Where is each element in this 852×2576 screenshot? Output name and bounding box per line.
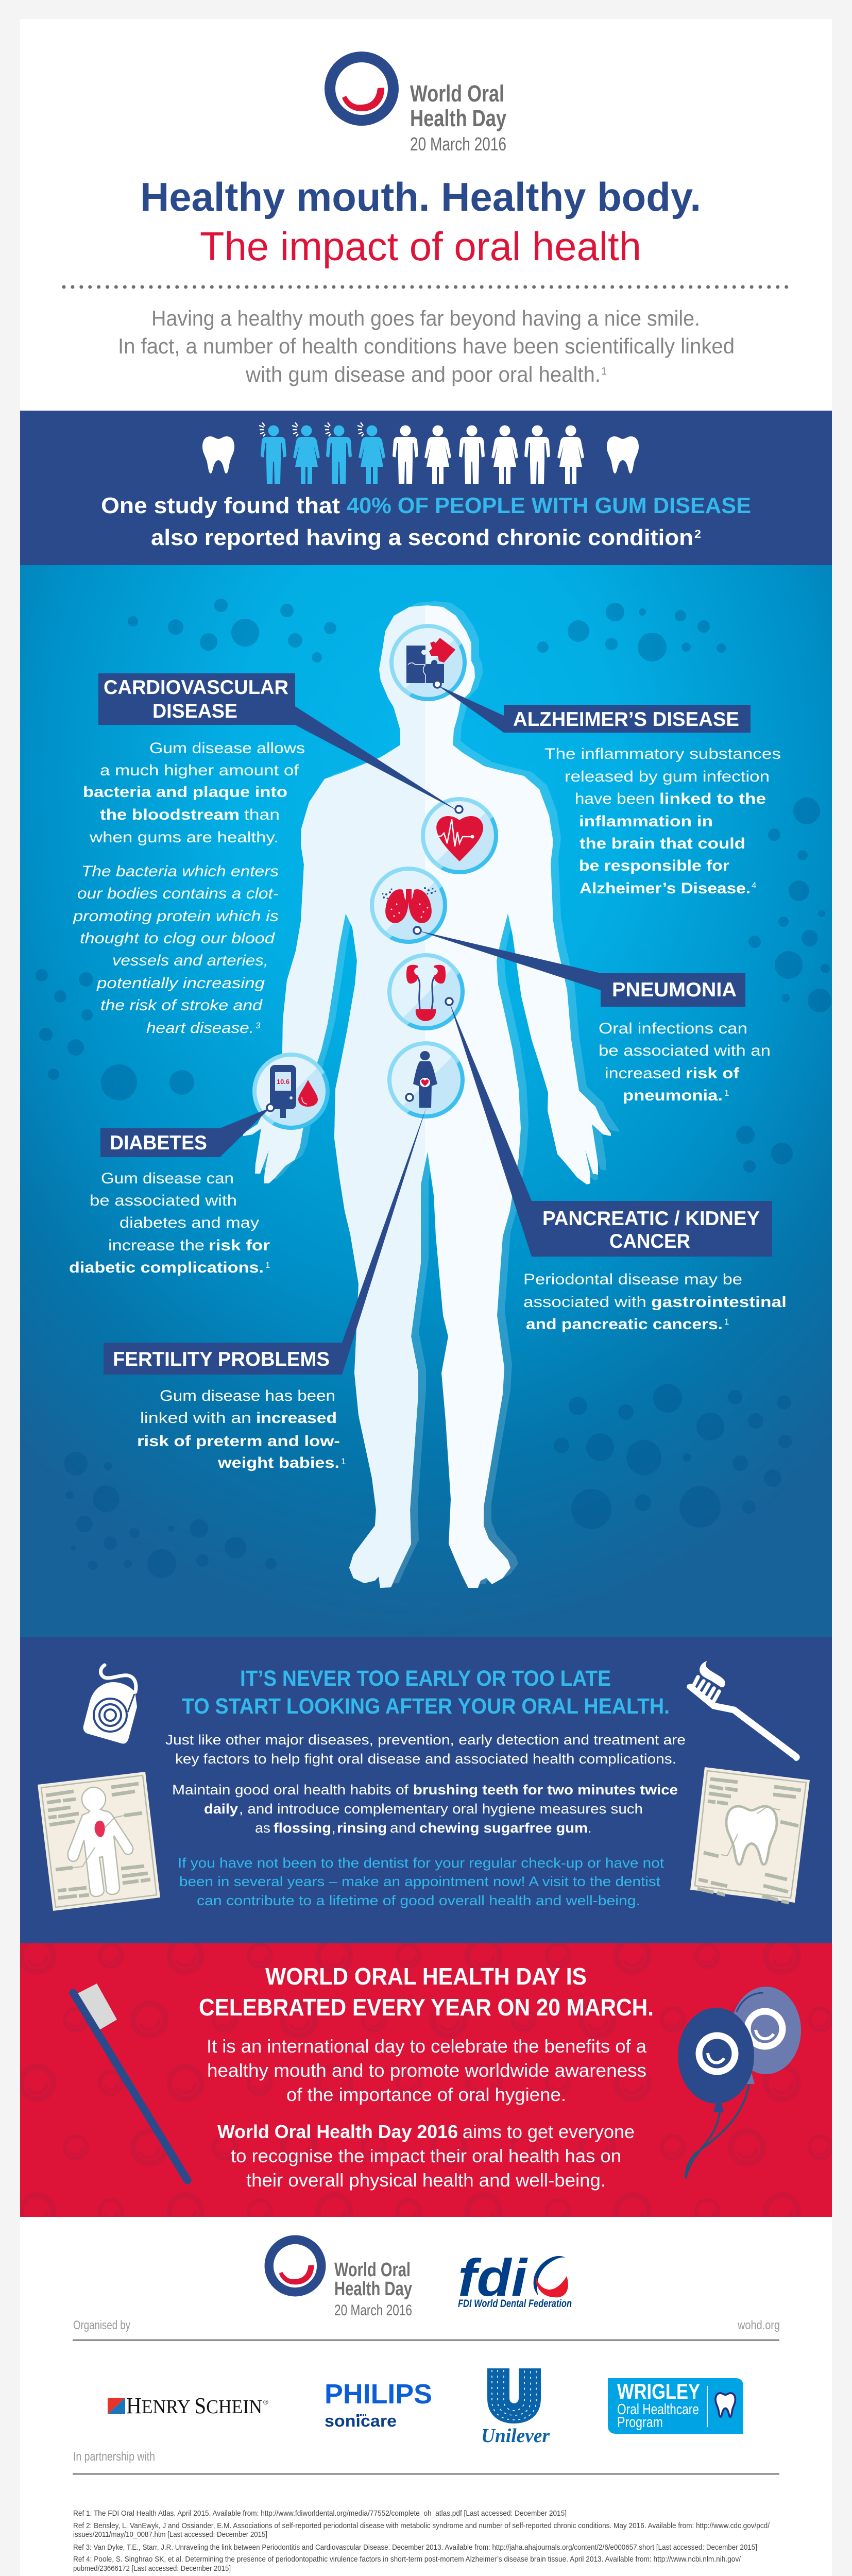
text: oral habits paragraph: rinsing [337, 1820, 387, 1836]
callout: cardiovascular disease [98, 673, 295, 725]
text: cardiovascular description: The bacteria which enters [81, 863, 279, 880]
text: oral habits paragraph: chewing sugarfree gum [419, 1820, 588, 1836]
text: dentist call to action: can contribute to a lifetime of good overall health and well-being. [197, 1893, 640, 1908]
callout: cardiovascular disease: CARDIOVASCULAR [104, 676, 288, 699]
text: alzheimer's description: the brain that could [580, 835, 745, 852]
people pictogram: 4 of 10 highlighted [259, 422, 584, 484]
statistic text: One study found that [101, 493, 340, 518]
text: dentist call to action [178, 1855, 664, 1908]
text: cardiovascular description: when gums are healthy. [89, 829, 279, 846]
heading: celebrated every year: CELEBRATED EVERY YEAR ON 20 MARCH. [199, 1994, 654, 2021]
title: Healthy mouth. Healthy body. [140, 174, 701, 219]
icon: glucose meter circle: 10.6 [277, 1078, 289, 1086]
logo: Unilever [481, 2368, 550, 2447]
callout: fertility problems [104, 1343, 342, 1375]
logo: Wrigley Oral Healthcare Program: Oral Healthcare [617, 2401, 699, 2418]
footer logo: World Oral Health Day [269, 2240, 412, 2319]
text: cardiovascular description: than [244, 806, 280, 823]
text: fertility description: 1 [341, 1456, 346, 1466]
label: organised by: Organised by [73, 2318, 130, 2332]
intro text: Having a healthy mouth goes far beyond having a nice smile. [151, 306, 700, 330]
callout: pneumonia: PNEUMONIA [612, 979, 737, 1001]
logo: Henry Schein: HENRY SCHEIN [126, 2393, 262, 2418]
text: pancreatic description: Periodontal disease may be [523, 1271, 742, 1288]
text: pancreatic description: associated with [523, 1294, 646, 1311]
footer logo: World Oral Health Day: World Oral [334, 2259, 411, 2281]
logo: FDI World Dental Federation: FDI World Dental Federation [458, 2298, 572, 2310]
text: diabetes description: risk for [209, 1237, 270, 1254]
text: diabetes description: 1 [265, 1260, 270, 1270]
text: alzheimer's description: The inflammatory substances [544, 745, 781, 762]
subtitle: The impact of oral health [200, 224, 641, 269]
text: oral habits paragraph: and [390, 1820, 416, 1836]
heading: never too early: TO START LOOKING AFTER YOUR ORAL HEALTH. [182, 1694, 670, 1719]
text: alzheimer's description: inflammation in [579, 813, 713, 830]
text: prevention paragraph [165, 1732, 686, 1767]
references: pubmed/23666172 [Last accessed: December 2015] [73, 2564, 231, 2573]
text: diabetes description: diabetes and may [120, 1214, 259, 1231]
panel: world oral health day [20, 1940, 832, 2227]
header logo: World Oral Health Day: 20 March 2016 [410, 133, 506, 155]
intro text: In fact, a number of health conditions have been scientifically linked [118, 334, 735, 358]
text: pneumonia description: be associated with an [599, 1042, 771, 1059]
text: dentist call to action: If you have not been to the dentist for your regular check-up or have not [178, 1855, 664, 1871]
icon: glucose meter circle [254, 1055, 328, 1128]
text: international day paragraph [207, 2036, 647, 2105]
text: fertility description: risk of preterm and low- [137, 1433, 340, 1450]
callout: cardiovascular disease: DISEASE [152, 700, 237, 722]
logo: Unilever: Unilever [481, 2425, 550, 2447]
text: oral habits paragraph: , [332, 1820, 336, 1836]
text: alzheimer's description: Alzheimer’s Disease. [580, 880, 751, 897]
label: website: wohd.org [737, 2318, 780, 2332]
text: oral habits paragraph [172, 1782, 678, 1836]
text: cardiovascular description: our bodies contains a clot- [77, 885, 279, 902]
logo: Philips Sonicare [325, 2379, 432, 2430]
icon: pregnancy circle [389, 1043, 463, 1116]
callout pointers and nodes [220, 681, 601, 1375]
heading: never too early: IT’S NEVER TOO EARLY OR TOO LATE [240, 1666, 611, 1691]
logo: Wrigley Oral Healthcare Program [608, 2378, 743, 2434]
text: pneumonia description [599, 1020, 771, 1104]
text: fertility description: increased [256, 1410, 337, 1427]
statistic text: also reported having a second chronic condition [151, 525, 693, 550]
heading: celebrated every year [199, 1963, 654, 2021]
text: pancreatic description [523, 1271, 787, 1333]
text: cardiovascular description: Gum disease allows [149, 740, 305, 757]
text: alzheimer's description: linked to the [659, 790, 766, 807]
panel: prevention advice [20, 1637, 832, 1943]
logo: Philips Sonicare: sonicare [325, 2412, 397, 2430]
header logo: World Oral Health Day [330, 57, 506, 155]
text: cardiovascular description: the risk of stroke and [100, 997, 263, 1014]
text: international day paragraph: of the importance of oral hygiene. [286, 2084, 566, 2105]
icon: toothbrush [73, 1984, 188, 2180]
header logo: World Oral Health Day: World Oral [410, 80, 504, 107]
text: cardiovascular description: heart disease. [146, 1020, 254, 1037]
text: international day paragraph: healthy mouth and to promote worldwide awareness [207, 2060, 646, 2081]
logo: Philips Sonicare: PHILIPS [325, 2379, 432, 2410]
text: prevention paragraph: key factors to help fight oral disease and associated health complications. [175, 1751, 676, 1767]
text: pneumonia description: Oral infections can [599, 1020, 747, 1037]
logo: Wrigley Oral Healthcare Program: Program [617, 2414, 663, 2431]
text: dentist call to action: been in several years – make an appointment now! A visit to the dentist [179, 1874, 661, 1889]
text: cardiovascular description: the bloodstream [100, 806, 240, 823]
text: alzheimer's description: have been [575, 790, 655, 807]
icon: toothbrush with paste [687, 1661, 800, 1761]
text: 2016 aim paragraph: aims to get everyone [463, 2121, 635, 2142]
icon: balloons [678, 1987, 801, 2178]
text: pancreatic description: gastrointestinal [651, 1294, 787, 1311]
text: fertility description: weight babies. [217, 1454, 339, 1471]
text: cardiovascular description: vessels and arteries, [112, 952, 268, 969]
footer logo: World Oral Health Day: Health Day [334, 2278, 412, 2300]
logo: FDI World Dental Federation: fdi [458, 2248, 529, 2307]
panel: body diagram [20, 565, 832, 1637]
text: diabetes description: Gum disease can [101, 1170, 234, 1187]
references: Ref 1: The FDI Oral Health Atlas. April 2015. Available from: http://www.fdiworldental.org/media/77552/complete_oh_atlas.pdf [Last accessed: December 2015] [73, 2509, 567, 2518]
icon: right tooth [607, 436, 639, 473]
text: fertility description: linked with an [140, 1410, 251, 1427]
text: fertility description [137, 1387, 346, 1471]
text: alzheimer's description: 4 [752, 880, 756, 890]
callout: pancreatic / kidney cancer [532, 1201, 772, 1257]
icon: kidneys circle [389, 955, 463, 1028]
background bubbles [36, 599, 831, 1578]
background logo pattern [21, 1940, 832, 2227]
references: Ref 3: Van Dyke, T.E., Starr, J.R. Unraveling the link between Periodontitis and Cardiovascular Disease. December 2013. Available from: http://jaha.ahajournals.org/content/2/6/e000657.short [Last accessed: December 2015] [73, 2543, 757, 2552]
references [73, 2509, 770, 2573]
text: pancreatic description: and pancreatic cancers. [526, 1316, 723, 1333]
text: cardiovascular description: thought to clog our blood [80, 930, 276, 947]
text: pneumonia description: 1 [724, 1088, 729, 1098]
panel: statistic band [20, 411, 832, 565]
statistic text: 2 [694, 528, 701, 540]
callout: pancreatic / kidney cancer: PANCREATIC / KIDNEY [542, 1208, 760, 1230]
text: international day paragraph: It is an international day to celebrate the benefits of a [207, 2036, 647, 2057]
text: cardiovascular description: potentially increasing [96, 975, 265, 992]
callout: alzheimer's disease: ALZHEIMER’S DISEASE [513, 708, 739, 731]
text: pneumonia description: pneumonia. [623, 1087, 723, 1104]
text: diabetes description [69, 1170, 270, 1276]
intro text: with gum disease and poor oral health. [245, 362, 601, 386]
text: prevention paragraph: Just like other major diseases, prevention, early detection and treatment are [165, 1732, 686, 1748]
header logo: World Oral Health Day: Health Day [410, 105, 506, 131]
label: in partnership with: In partnership with [73, 2450, 155, 2464]
text: diabetes description: diabetic complications. [69, 1259, 264, 1276]
text: pancreatic description: 1 [724, 1317, 729, 1327]
heading: never too early [182, 1666, 670, 1719]
intro text [118, 306, 735, 386]
text: pneumonia description: risk of [686, 1065, 740, 1082]
intro text: 1 [601, 366, 607, 377]
human body silhouette [243, 601, 619, 1588]
footer logo: World Oral Health Day: 20 March 2016 [334, 2302, 412, 2319]
text: 2016 aim paragraph: World Oral Health Day 2016 [217, 2121, 458, 2142]
text: cardiovascular description: a much higher amount of [100, 762, 299, 779]
icon: left tooth [202, 436, 234, 473]
text: alzheimer's description: be responsible for [579, 857, 729, 874]
text: alzheimer's description [544, 745, 781, 897]
callout: diabetes: DIABETES [110, 1132, 207, 1154]
references: Ref 4: Poole, S. Singhrao SK, et al. Determining the presence of periodontopathic virulence factors in short-term post-mortem Alzheimer’s disease brain tissue. April 2013. Available from: http://www.ncbi.nlm.nih.gov/ [73, 2555, 741, 2564]
text: oral habits paragraph: Maintain good oral health habits of [172, 1782, 409, 1798]
icon: medical chart with tooth [690, 1767, 810, 1903]
icon: heart circle [423, 799, 496, 872]
text: oral habits paragraph: brushing teeth for two minutes twice [413, 1782, 678, 1798]
icon: brain puzzle circle [391, 626, 465, 699]
text: 2016 aim paragraph [217, 2121, 635, 2191]
statistic text: 40% OF PEOPLE WITH GUM DISEASE [347, 493, 751, 518]
text: oral habits paragraph: daily [204, 1801, 238, 1817]
text: oral habits paragraph: . [588, 1820, 592, 1836]
text: fertility description: Gum disease has been [160, 1387, 335, 1404]
text: alzheimer's description: released by gum infection [565, 768, 770, 785]
text: 2016 aim paragraph: their overall physical health and well-being. [246, 2170, 606, 2191]
text: cardiovascular description: 3 [255, 1021, 261, 1030]
text: 2016 aim paragraph: to recognise the impact their oral health has on [231, 2145, 621, 2166]
text: diabetes description: increase the [108, 1237, 205, 1254]
text: pneumonia description: increased [605, 1065, 681, 1082]
logo: Henry Schein: ® [263, 2398, 268, 2406]
references: Ref 2: Bensley, L. VanEwyk, J and Ossiander, E.M. Associations of self-reported periodontal disease with metabolic syndrome and number of self-reported chronic conditions. May 2016. Available from: http://www.cdc.gov/pcd/ [73, 2521, 770, 2530]
callout: fertility problems: FERTILITY PROBLEMS [113, 1348, 330, 1370]
icon: dental floss [83, 1665, 137, 1744]
heading: celebrated every year: WORLD ORAL HEALTH DAY IS [265, 1963, 587, 1990]
logo: Wrigley Oral Healthcare Program: WRIGLEY [617, 2379, 700, 2403]
callout: pneumonia [601, 973, 745, 1007]
text: diabetes description: be associated with [90, 1192, 237, 1209]
icon: medical chart with body [38, 1772, 160, 1911]
logo: FDI World Dental Federation [458, 2248, 572, 2310]
text: oral habits paragraph: , and introduce complementary oral hygiene measures such [239, 1801, 643, 1817]
callout: diabetes [100, 1128, 220, 1157]
statistic text [101, 493, 751, 550]
callout: pancreatic / kidney cancer: CANCER [609, 1230, 690, 1252]
references: issues/2011/may/10_0087.htm [Last accessed: December 2015] [73, 2530, 267, 2539]
text: cardiovascular description [73, 740, 305, 1037]
text: oral habits paragraph: as [255, 1820, 270, 1836]
text: cardiovascular description: promoting protein which is [73, 908, 279, 925]
icon: lungs circle [372, 869, 445, 942]
text: cardiovascular description: bacteria and plaque into [83, 784, 287, 801]
text: oral habits paragraph: flossing [274, 1820, 331, 1836]
